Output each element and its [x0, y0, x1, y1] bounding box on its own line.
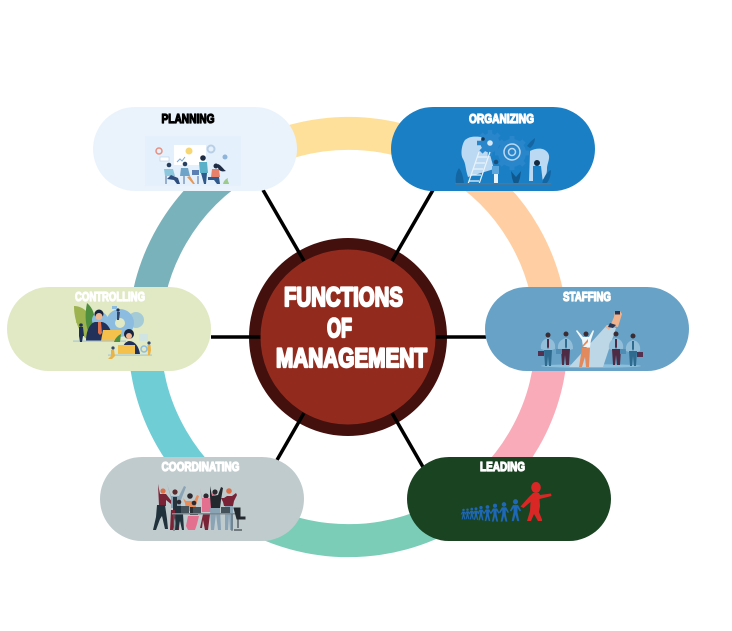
heading: controlling: CONTROLLING [75, 290, 145, 304]
icon: managers with laptops [73, 303, 152, 359]
heading: coordinating: COORDINATING [162, 460, 240, 474]
person [167, 484, 186, 530]
title: FUNCTIONS [284, 282, 403, 312]
person [609, 332, 626, 365]
panel: staffing [485, 287, 689, 371]
spokes connecting the center to the pills [211, 190, 486, 467]
person [538, 332, 555, 366]
person [221, 488, 237, 530]
ring segment: teal [144, 161, 246, 337]
people: seated pair [175, 493, 199, 530]
icon: gears and ladder [455, 130, 551, 184]
gear: center [495, 136, 529, 170]
person [153, 484, 173, 530]
person [626, 334, 643, 366]
icon: red leader [520, 482, 552, 521]
title [276, 282, 427, 373]
panel: organizing [391, 107, 595, 191]
heading: staffing: STAFFING [563, 290, 611, 304]
title: OF [327, 313, 352, 343]
panel: leading [407, 457, 611, 541]
ring segment: yellow [246, 133, 451, 161]
ring segment: green [246, 513, 451, 541]
ring: colored segments [144, 133, 552, 541]
ring segment: cyan [144, 337, 246, 513]
icon: hand lifting an employee from a group [538, 311, 643, 368]
center circle: outer ring [249, 238, 447, 436]
panel: controlling [7, 287, 211, 371]
panel: planning [93, 107, 297, 191]
center circle with title [260, 250, 436, 424]
icon: team meeting at whiteboard [145, 136, 241, 186]
icon: red leader pulling a line of blue people [461, 482, 552, 522]
person [200, 488, 215, 530]
person [556, 332, 573, 365]
heading: leading: LEADING [480, 460, 525, 474]
gear: upper left [477, 130, 503, 156]
panel: coordinating [100, 457, 304, 541]
icon: celebrating team around a table [153, 484, 245, 531]
ring segment: peach [451, 161, 552, 337]
icon: blue followers [461, 499, 521, 522]
person [210, 486, 223, 530]
heading: planning: PLANNING [162, 112, 214, 126]
title: MANAGEMENT [276, 343, 427, 373]
person: raised employee [576, 330, 594, 367]
heading: organizing: ORGANIZING [469, 112, 534, 126]
ring segment: pink [451, 337, 552, 513]
